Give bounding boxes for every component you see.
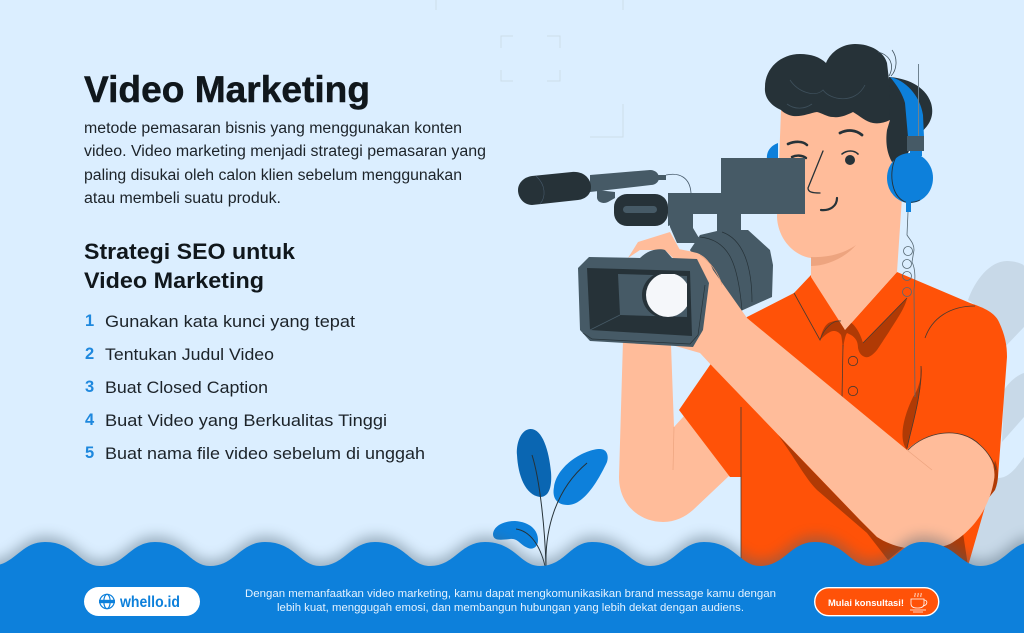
intro paragraph (84, 120, 486, 207)
camera hood (578, 249, 709, 347)
viewfinder (721, 158, 805, 214)
numbered list: 3 (85, 378, 94, 396)
shirt shadows (778, 298, 998, 566)
numbered list: Buat Video yang Berkualitas Tinggi (105, 411, 387, 430)
call to action button: Mulai konsultasi! (828, 598, 904, 609)
right arm and hand (665, 249, 994, 549)
facial features (788, 131, 862, 210)
footer message (245, 588, 776, 614)
hair lines (787, 50, 896, 108)
eyepiece (614, 194, 682, 226)
numbered list: 5 (85, 444, 94, 462)
wave shadow (0, 536, 1024, 600)
numbered list: 4 (85, 411, 95, 429)
hand behind camera (628, 232, 680, 258)
icon: coffee cup (910, 593, 927, 612)
background leaves (967, 261, 1024, 570)
arm crease lines (673, 255, 932, 470)
headphones (887, 64, 933, 212)
intro paragraph: video. Video marketing menjadi strategi pemasaran yang (84, 143, 486, 160)
title: Video Marketing (84, 69, 370, 110)
numbered list (85, 312, 425, 463)
logo pill (84, 587, 200, 616)
sleeve cuff line (908, 433, 996, 470)
numbered list: Gunakan kata kunci yang tepat (105, 312, 355, 331)
plant (493, 429, 608, 566)
eye (845, 155, 855, 165)
neck and face (777, 90, 902, 330)
numbered list: 2 (85, 345, 94, 363)
footer message: lebih kuat, menggugah emosi, dan membangun hubungan yang lebih dekat dengan audiens. (277, 602, 744, 614)
intro paragraph: atau membeli suatu produk. (84, 190, 281, 207)
shirt (679, 272, 1007, 566)
icon: globe (99, 594, 115, 609)
left arm (619, 340, 730, 522)
numbered list: 1 (85, 312, 94, 330)
chin shadow (811, 245, 856, 266)
call to action button (815, 588, 939, 616)
microphone (518, 170, 691, 205)
intro paragraph: metode pemasaran bisnis yang menggunakan konten (84, 120, 462, 137)
coiled wire (902, 212, 915, 397)
shirt detail lines (741, 293, 975, 566)
numbered list: Buat Closed Caption (105, 378, 268, 397)
camera body (668, 193, 773, 320)
numbered list: Buat nama file video sebelum di unggah (105, 444, 425, 463)
section heading: Strategi SEO untuk (84, 239, 296, 264)
far ear cup (767, 143, 778, 160)
footer wave (0, 542, 1024, 633)
numbered list: Tentukan Judul Video (105, 345, 274, 364)
section heading (84, 239, 296, 293)
section heading: Video Marketing (84, 268, 264, 293)
footer message: Dengan memanfaatkan video marketing, kamu dapat mengkomunikasikan brand message kamu dengan (245, 588, 776, 600)
intro paragraph: paling disukai oleh calon klien sebelum menggunakan (84, 167, 462, 184)
hair (765, 44, 890, 123)
back hair over face (886, 85, 908, 162)
logo pill: whello.id (119, 594, 180, 611)
illustration: man with video camera (518, 44, 1007, 566)
back hair (885, 77, 932, 162)
